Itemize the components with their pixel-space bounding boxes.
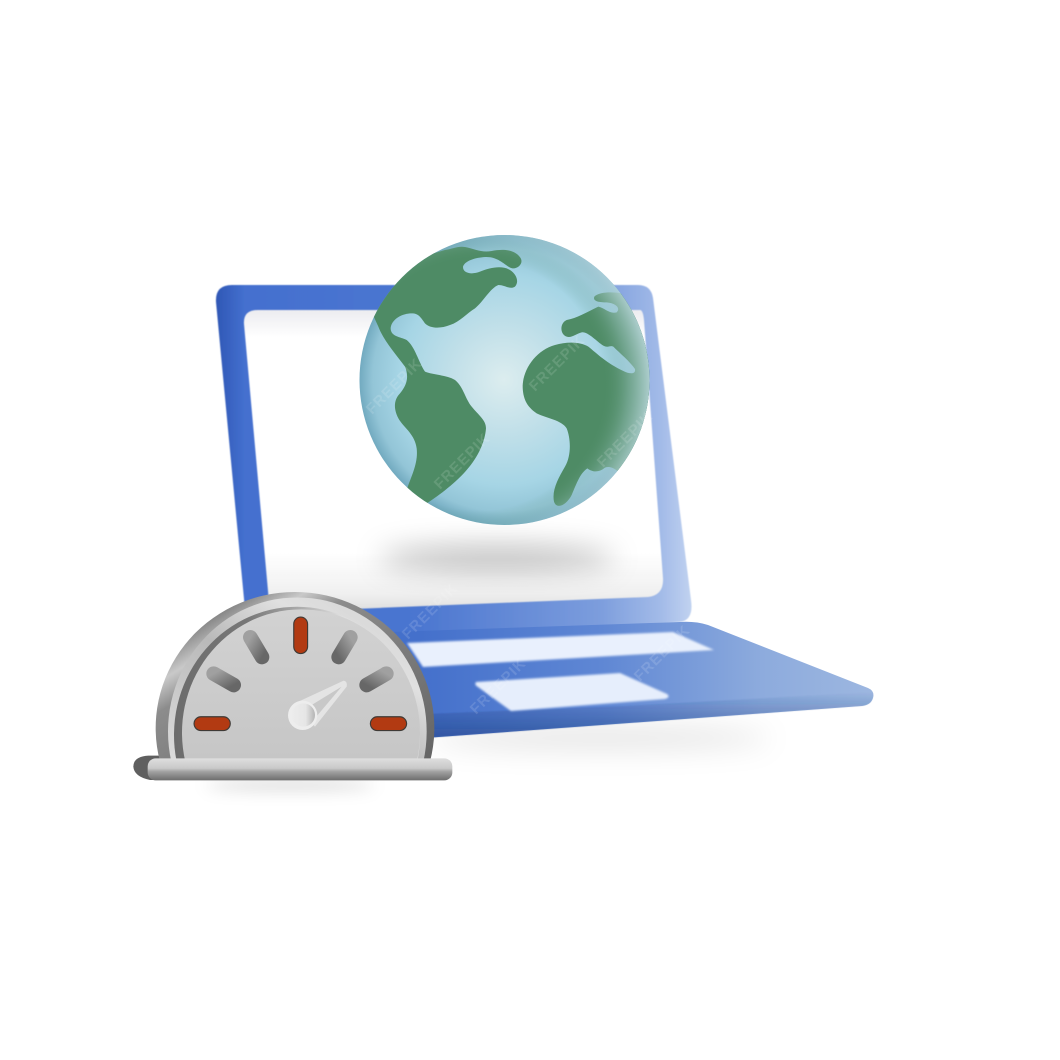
watermarks xyxy=(363,332,694,718)
speedometer base back xyxy=(133,756,192,780)
globe edge glow xyxy=(426,235,650,524)
speedometer xyxy=(133,592,452,780)
red tick right xyxy=(377,701,400,746)
speed needle xyxy=(293,681,347,727)
speedometer outer rim xyxy=(156,592,434,762)
shadow under laptop xyxy=(430,728,770,748)
shadow under globe xyxy=(379,546,615,570)
continent: right landmass xyxy=(523,292,657,506)
speedometer base bar xyxy=(148,758,452,780)
watermark text: FREEPIK xyxy=(363,355,426,418)
laptop screen xyxy=(244,310,663,612)
keyboard area xyxy=(407,632,714,667)
globe xyxy=(360,235,657,525)
speedometer face xyxy=(182,609,420,762)
laptop xyxy=(216,285,873,738)
watermark text: FREEPIK xyxy=(594,408,657,471)
gray ticks xyxy=(214,637,386,685)
watermark text: FREEPIK xyxy=(431,430,494,493)
laptop lid xyxy=(216,285,692,640)
continent: left landmass xyxy=(370,247,521,503)
shadow under speedometer xyxy=(205,781,375,789)
needle shading xyxy=(310,687,342,717)
illustration: laptop, globe and speedometer xyxy=(133,235,874,796)
needle hub xyxy=(288,701,317,730)
speedometer light ring xyxy=(168,597,427,762)
red tick top xyxy=(278,624,323,647)
globe ocean xyxy=(360,235,650,525)
watermark text: FREEPIK xyxy=(467,655,530,718)
trackpad xyxy=(475,673,669,711)
watermark text: FREEPIK xyxy=(399,580,462,643)
speedometer dark inner ring xyxy=(174,607,420,762)
watermark text: FREEPIK xyxy=(631,622,694,685)
laptop front edge xyxy=(425,692,873,738)
globe continents xyxy=(360,235,657,525)
laptop base deck xyxy=(390,622,873,738)
watermark text: FREEPIK xyxy=(526,332,589,395)
red tick left xyxy=(201,701,223,746)
